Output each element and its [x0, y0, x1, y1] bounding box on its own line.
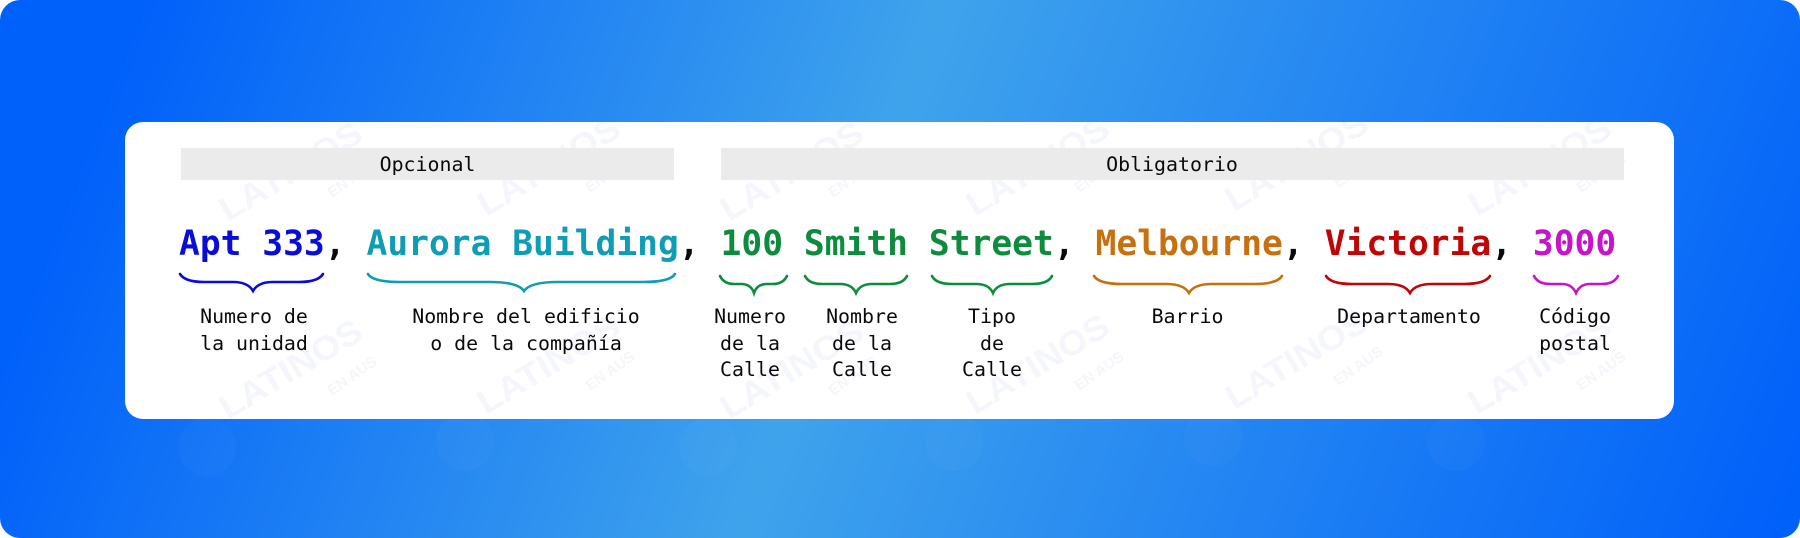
address part: 3000	[1533, 224, 1618, 355]
address part: Apt 333: Numero de	[200, 305, 308, 328]
address part: Melbourne: Melbourne,	[1096, 224, 1304, 264]
watermark globes on blue	[178, 408, 1485, 476]
address part: Apt 333: la unidad	[200, 332, 308, 355]
watermarks inside card: EN AUS	[826, 353, 881, 399]
address part: 100: Calle	[720, 358, 780, 381]
address part: Smith: Nombre	[826, 305, 898, 328]
address part: Melbourne: Barrio	[1152, 305, 1223, 328]
watermarks inside card: EN AUS	[583, 348, 638, 394]
address part: 100: Numero	[714, 305, 786, 328]
header: Opcional	[181, 148, 674, 180]
watermarks inside card: EN AUS	[1574, 150, 1629, 196]
address part: Melbourne	[1094, 224, 1304, 328]
address part: 100: 100	[721, 224, 783, 264]
watermarks inside card: EN AUS	[325, 155, 380, 201]
watermarks inside card: EN AUS	[1072, 150, 1127, 196]
watermarks inside card: EN AUS	[1574, 348, 1629, 394]
header: Obligatorio	[721, 148, 1624, 180]
watermarks inside card: LATINOS	[213, 114, 369, 229]
watermarks inside card: LATINOS	[960, 109, 1116, 224]
watermarks inside card: LATINOS	[471, 109, 627, 224]
address part: Street: Tipo	[968, 305, 1016, 328]
watermarks inside card: EN AUS	[1072, 348, 1127, 394]
watermarks inside card: LATINOS	[1219, 302, 1375, 417]
watermarks inside card: LATINOS	[471, 307, 627, 422]
address part: Aurora Building: Aurora Building,	[366, 224, 700, 264]
address part: Street	[929, 224, 1075, 381]
address part: Apt 333: Apt 333,	[179, 224, 346, 264]
address diagram	[125, 122, 1674, 419]
watermarks inside card: LATINOS	[1462, 109, 1618, 224]
watermarks inside card: EN AUS	[583, 150, 638, 196]
address part: Smith: Calle	[832, 358, 892, 381]
address part: Street: Calle	[962, 358, 1022, 381]
watermarks inside card: LATINOS	[1462, 307, 1618, 422]
address part: Apt 333	[179, 224, 346, 355]
address part: Victoria: Departamento	[1337, 305, 1481, 328]
address part: Victoria: Victoria,	[1325, 224, 1512, 264]
address part: 100	[714, 224, 787, 381]
header: Obligatorio: Obligatorio	[1106, 153, 1238, 176]
address part: Street: Street,	[929, 224, 1075, 264]
address part: Smith: de la	[832, 332, 892, 355]
address part: 3000: 3000	[1533, 224, 1616, 264]
address part: Aurora Building: Nombre del edificio	[412, 305, 640, 328]
address part: Aurora Building	[366, 224, 700, 355]
watermarks inside card: EN AUS	[1331, 145, 1386, 191]
panel: white card	[125, 122, 1674, 419]
watermarks inside card: LATINOS	[213, 312, 369, 427]
address part: Smith: Smith	[804, 224, 908, 264]
watermarks inside card: LATINOS	[714, 312, 870, 427]
address part: 3000: Código	[1539, 305, 1611, 328]
address part: Aurora Building: o de la compañía	[430, 332, 622, 355]
address part: Street: de	[980, 332, 1004, 355]
watermarks inside card: EN AUS	[1331, 343, 1386, 389]
address part: Smith	[804, 224, 908, 381]
watermarks inside card: EN AUS	[826, 155, 881, 201]
header: Opcional: Opcional	[380, 153, 475, 176]
watermarks inside card: LATINOS	[714, 114, 870, 229]
watermarks inside card	[213, 104, 1629, 427]
watermarks inside card: LATINOS	[1219, 104, 1375, 219]
address part: 3000: postal	[1539, 332, 1611, 355]
address part: Victoria	[1325, 224, 1512, 328]
watermarks inside card: EN AUS	[325, 353, 380, 399]
watermarks inside card: LATINOS	[960, 307, 1116, 422]
address part: 100: de la	[720, 332, 780, 355]
